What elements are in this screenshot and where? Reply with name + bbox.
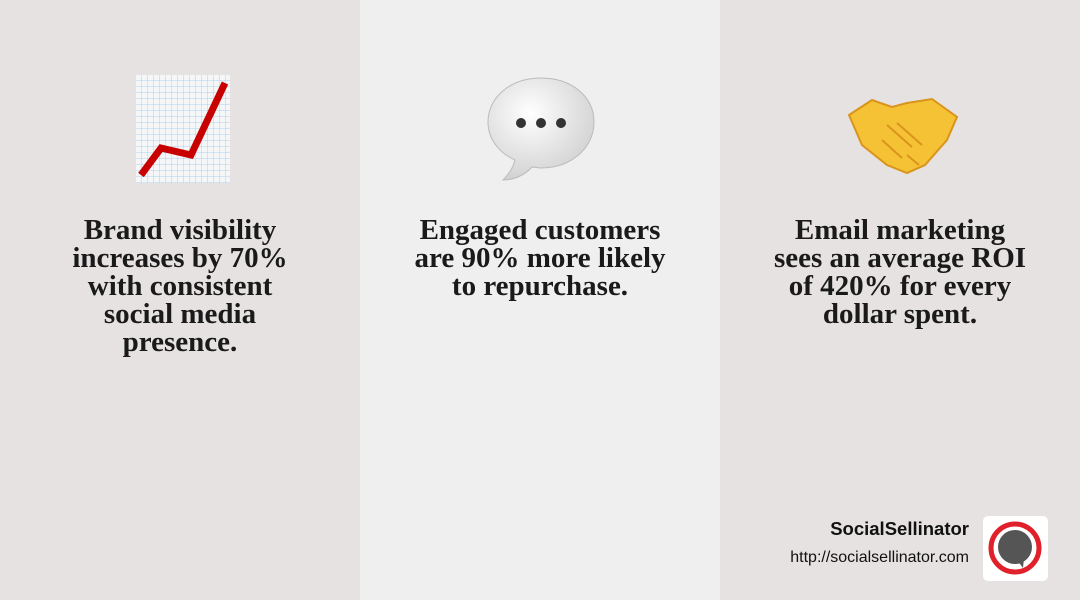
text: stat 2: to repurchase. bbox=[452, 270, 628, 302]
text: stat 1: increases by 70% bbox=[72, 242, 288, 274]
text: stat 1 bbox=[72, 214, 288, 358]
footer: url: http://socialsellinator.com bbox=[790, 549, 969, 566]
text: stat 3 bbox=[774, 214, 1026, 330]
text: stat 2: Engaged customers bbox=[420, 214, 660, 246]
text: stat 3: dollar spent. bbox=[823, 298, 977, 330]
text: stat 3: of 420% for every bbox=[789, 270, 1011, 302]
panel: email marketing bbox=[720, 0, 1080, 600]
logo bbox=[983, 516, 1048, 581]
text: stat 1: presence. bbox=[123, 326, 237, 358]
icon: handshake bbox=[848, 98, 958, 174]
text: stat 2 bbox=[414, 214, 666, 302]
text: stat 1: social media bbox=[104, 298, 256, 330]
text: stat 3: Email marketing bbox=[795, 214, 1005, 246]
text: stat 1: Brand visibility bbox=[84, 214, 276, 246]
panel: brand visibility bbox=[0, 0, 360, 600]
text: stat 2: are 90% more likely bbox=[414, 242, 666, 274]
icon: speech bubble bbox=[488, 78, 594, 180]
icon: chart increasing bbox=[136, 75, 230, 183]
text: stat 1: with consistent bbox=[88, 270, 272, 302]
footer: brand name: SocialSellinator bbox=[830, 518, 969, 539]
text: stat 3: sees an average ROI bbox=[774, 242, 1026, 274]
panel: engaged customers bbox=[360, 0, 720, 600]
